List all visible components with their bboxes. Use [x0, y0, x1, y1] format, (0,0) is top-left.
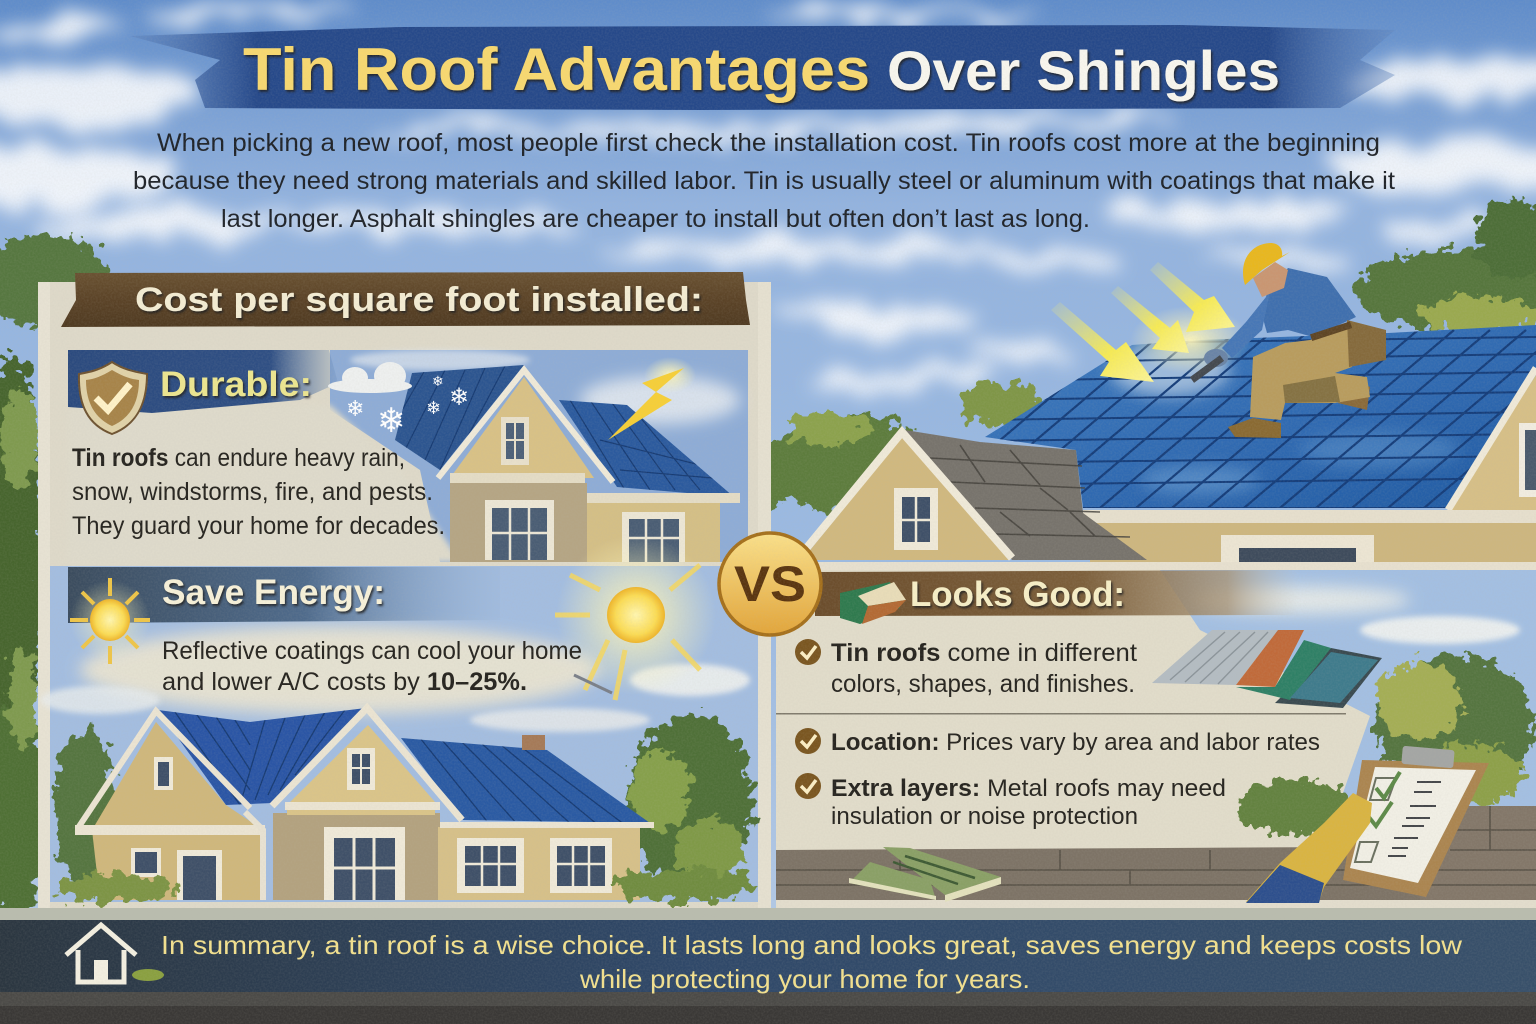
- durable text fade: [68, 405, 460, 562]
- right panel body: [776, 570, 1536, 908]
- big roof: [985, 325, 1536, 508]
- lower window: [1221, 535, 1374, 565]
- icon: snowflakes: ❄: [346, 396, 364, 421]
- house: energy illustration: [75, 708, 654, 900]
- icon: yellow reflection arrows: [1051, 262, 1250, 382]
- item: tin roofs: Tin roofs come in different: [831, 639, 1137, 667]
- panel: title banner: [130, 25, 1395, 110]
- energy body text: Reflective coatings can cool your home: [162, 637, 582, 665]
- icon: snowflakes: ❄: [377, 402, 406, 440]
- trees behind house: [53, 715, 752, 890]
- back boot: [1338, 377, 1370, 410]
- house: durable illustration: [385, 365, 740, 562]
- divider: [776, 713, 1346, 714]
- item: tin roofs: [795, 639, 1137, 698]
- item: extra layers: Extra layers: Metal roofs may need: [831, 775, 1226, 802]
- roof panel seams: [1000, 329, 1536, 508]
- energy header ribbon: [68, 567, 500, 623]
- right panel sky: [1160, 570, 1536, 830]
- hard hat: [1243, 243, 1290, 285]
- icon: small sun: [70, 578, 150, 664]
- icon: clipboard and glove: [1246, 746, 1489, 903]
- icon: big sun: [555, 535, 716, 700]
- icon: vs badge: VS: [734, 556, 806, 612]
- illustration: big blue roof house: [800, 325, 1536, 570]
- energy body text: [162, 637, 582, 696]
- panel: title banner: Tin Roof Advantages: [243, 36, 870, 103]
- durable body text: [72, 444, 445, 540]
- heading: durable: Durable:: [160, 365, 312, 404]
- panel: save energy: [40, 535, 758, 902]
- icon: house: [66, 925, 164, 982]
- summary text: while protecting your home for years.: [579, 964, 1030, 994]
- icon: vs badge: [719, 533, 821, 635]
- house wall: [1090, 515, 1536, 570]
- shadowed lower leg: [1283, 376, 1340, 403]
- glove and tool: [1204, 349, 1228, 367]
- shrubs: [55, 869, 755, 902]
- panel: durable: [68, 350, 748, 562]
- icon: snowflakes: ❄: [432, 373, 444, 389]
- intro text: last longer. Asphalt shingles are cheaper to install but often don’t last as long.: [221, 205, 1090, 233]
- tool belt: [1347, 320, 1386, 367]
- front boot: [1228, 418, 1281, 438]
- energy sky: [50, 566, 758, 902]
- item: extra layers: [795, 773, 1226, 830]
- energy body text: and lower A/C costs by 10–25%.: [162, 668, 527, 696]
- illustration: roofer worker: [1192, 243, 1386, 438]
- panel: looks good: [776, 570, 1536, 908]
- eave: [1083, 510, 1536, 523]
- icon: green books: [840, 582, 906, 624]
- trees: background right: [730, 200, 1536, 515]
- icon: snowflakes: ❄: [426, 398, 441, 418]
- icon: cloud: [328, 362, 412, 393]
- intro text: When picking a new roof, most people first check the installation cost. Tin roofs cost more at the beginning: [157, 129, 1380, 157]
- summary text: [161, 930, 1462, 994]
- icon: shield with check: [79, 362, 147, 434]
- intro text: because they need strong materials and skilled labor. Tin is usually steel or aluminum with coatings that make it: [133, 167, 1395, 195]
- item: extra layers: insulation or noise protection: [831, 803, 1138, 830]
- trees: background left: [0, 235, 110, 920]
- panel: left column background: [38, 282, 771, 908]
- roof strip: [776, 846, 1536, 900]
- arm: [1222, 292, 1270, 358]
- torso: [1262, 268, 1356, 337]
- panel: cost banner: [61, 272, 750, 327]
- durable header ribbon: [68, 350, 338, 413]
- trees right: [1237, 655, 1535, 836]
- heading: save energy: Save Energy:: [162, 573, 385, 612]
- panel: title banner: Over Shingles: [887, 39, 1280, 102]
- icon: cash stack: [849, 847, 1001, 902]
- small grey gable house: [802, 436, 1010, 560]
- trousers: [1250, 327, 1370, 420]
- heading: looks good: Looks Good:: [910, 575, 1125, 614]
- right gable: [1448, 375, 1536, 512]
- icon: snowflakes: [346, 373, 469, 440]
- icon: snowflakes: ❄: [449, 384, 469, 411]
- summary text: In summary, a tin roof is a wise choice. It lasts long and looks great, saves energy and keeps costs low: [161, 930, 1462, 960]
- durable body text: They guard your home for decades.: [72, 512, 445, 540]
- durable body text: Tin roofs can endure heavy rain,: [72, 444, 405, 472]
- durable sky: [330, 350, 748, 562]
- intro text: [133, 129, 1395, 233]
- panel: summary footer: [0, 908, 1536, 1024]
- icon: lightning bolt: [608, 357, 696, 440]
- head: [1253, 262, 1288, 297]
- icon: reflection streak: [574, 675, 612, 693]
- panel: cost banner: Cost per square foot installed:: [135, 281, 703, 319]
- item: location: Location: Prices vary by area and labor rates: [831, 729, 1320, 756]
- item: tin roofs: colors, shapes, and finishes.: [831, 670, 1135, 698]
- durable body text: snow, windstorms, fire, and pests.: [72, 478, 433, 506]
- icon: roof sample panels: [1152, 630, 1382, 708]
- wood header: [815, 570, 1300, 616]
